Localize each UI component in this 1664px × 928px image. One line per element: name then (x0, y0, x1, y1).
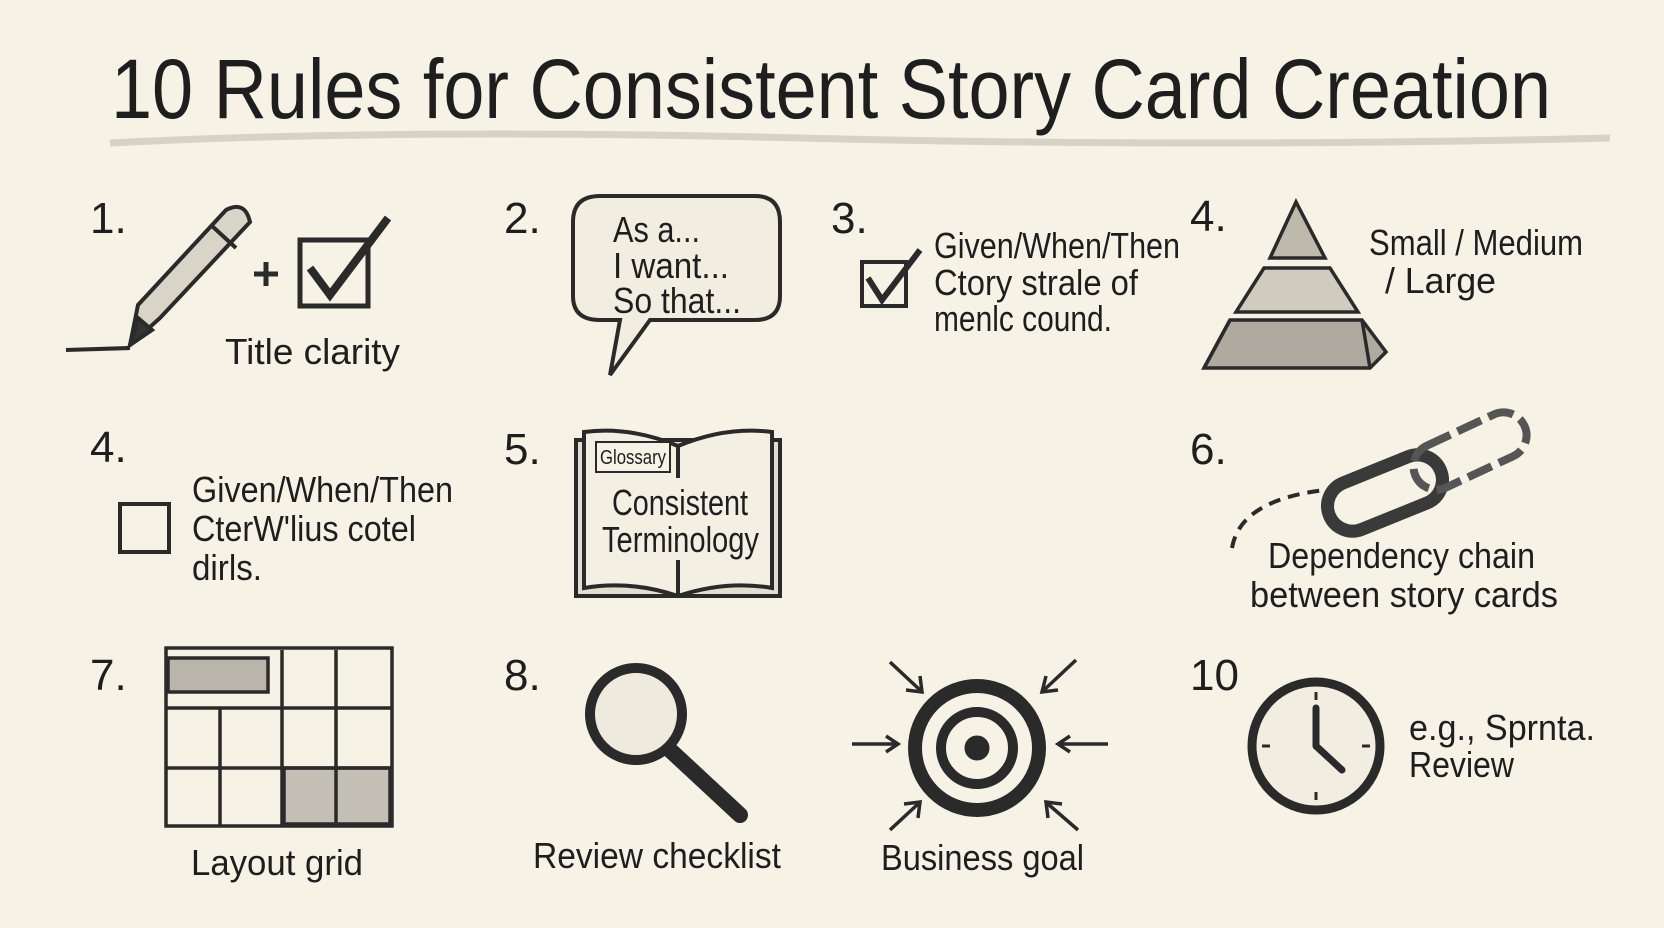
rule 9: business goal target: Business goal (881, 837, 1084, 878)
icon: checkbox (862, 250, 920, 306)
rule 5: glossary book: Glossary (600, 447, 666, 469)
rule 4b: given when then checklist: dirls. (192, 547, 262, 588)
rule 10: sprint review clock: Review (1409, 744, 1515, 785)
icon: target with arrows (852, 660, 1108, 830)
rule 1: title clarity (66, 194, 400, 372)
rule 7: layout grid: 7. (90, 651, 127, 700)
rule 2: speech bubble: So that... (613, 280, 741, 321)
rule 4b: given when then checklist: Given/When/Then (192, 469, 453, 510)
rule 10: sprint review clock: 10 (1190, 651, 1239, 700)
rule 1: title clarity: Title clarity (225, 331, 400, 372)
icon: pyramid (1204, 202, 1386, 368)
icon: open book (576, 431, 780, 596)
rule 6: dependency chain: Dependency chain (1268, 535, 1535, 576)
rule 4b: given when then checklist (90, 423, 453, 588)
rule 5: glossary book: 5. (504, 425, 541, 474)
icon: pencil (66, 207, 250, 350)
rule 7: layout grid (90, 648, 392, 883)
rule 4: sizing pyramid: / Large (1385, 260, 1496, 301)
rule 5: glossary book: Consistent (612, 482, 748, 523)
rule 8: review checklist magnifier: 8. (504, 651, 541, 700)
rule 10: sprint review clock: e.g., Sprnta. (1409, 707, 1595, 748)
rule 1: title clarity: 1. (90, 194, 127, 243)
rule 9: business goal target (852, 660, 1108, 878)
rule 6: dependency chain: between story cards (1250, 574, 1558, 615)
rule 8: review checklist magnifier: Review checklist (533, 835, 781, 876)
rule 5: glossary book: Terminology (602, 519, 759, 560)
icon: chain links (1232, 405, 1534, 548)
rule 2: speech bubble (504, 194, 780, 375)
icon: empty checkbox (120, 504, 169, 552)
rule 10: sprint review clock (1190, 651, 1595, 810)
rule 6: dependency chain: 6. (1190, 425, 1227, 474)
rule 4b: given when then checklist: CterW'lius cotel (192, 508, 416, 549)
rule 3: acceptance criteria: 3. (831, 194, 868, 243)
rule 4: sizing pyramid: 4. (1190, 192, 1227, 241)
rule 4: sizing pyramid: Small / Medium (1369, 222, 1583, 263)
rule 7: layout grid: Layout grid (191, 842, 363, 883)
icon: grid (166, 648, 392, 826)
rule 4b: given when then checklist: 4. (90, 423, 127, 472)
rule 3: acceptance criteria: Ctory strale of (934, 262, 1139, 303)
rule 3: acceptance criteria: menlc cound. (934, 298, 1112, 339)
rule 6: dependency chain (1190, 405, 1558, 615)
rule 5: glossary book (504, 425, 780, 596)
icon: magnifier (590, 668, 740, 815)
icon: clock (1252, 682, 1380, 810)
rule 2: speech bubble: 2. (504, 194, 541, 243)
icon: plus and checkbox (254, 218, 388, 306)
rule 8: review checklist magnifier (504, 651, 781, 876)
rule 2: speech bubble: As a... (613, 209, 700, 250)
rule 3: acceptance criteria: Given/When/Then (934, 225, 1180, 266)
rule 3: acceptance criteria (831, 194, 1180, 339)
rule 2: speech bubble: I want... (613, 245, 729, 286)
rule 4: sizing pyramid (1190, 192, 1583, 368)
